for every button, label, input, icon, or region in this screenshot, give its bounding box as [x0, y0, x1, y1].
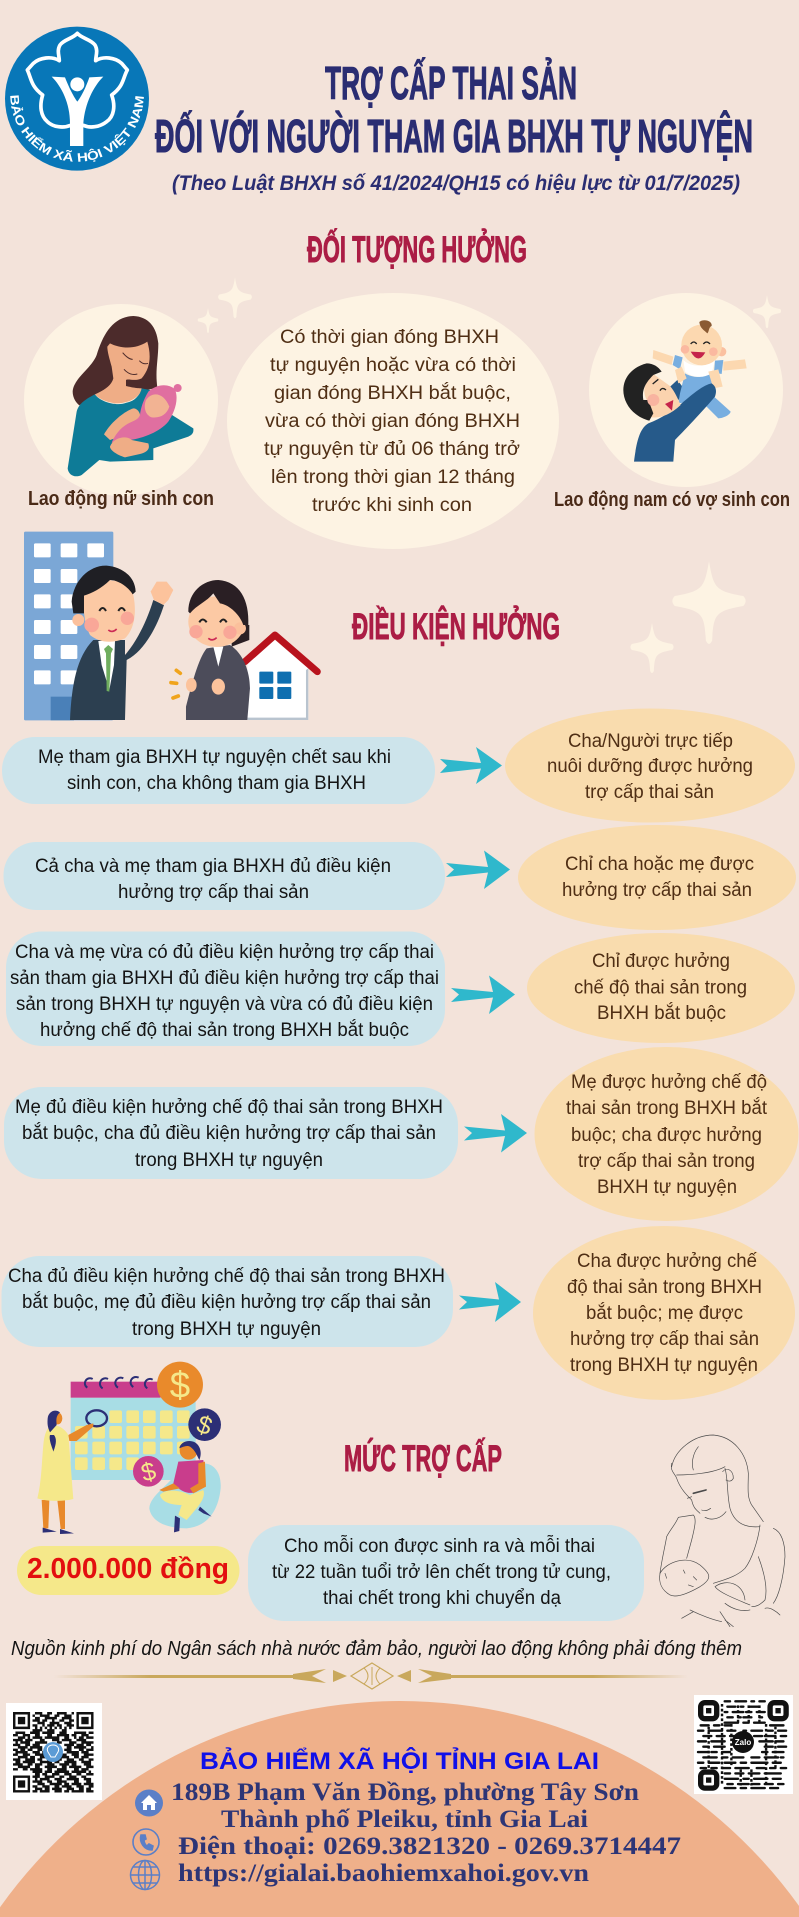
row 4 condition: Mẹ đủ điều kiện hưởng chế độ thai sản trong BHXH	[15, 1097, 443, 1118]
ornamental divider	[54, 1663, 688, 1689]
row 4 result: trợ cấp thai sản trong	[578, 1151, 755, 1172]
logo: Bảo hiểm xã hội Việt Nam: BẢO HIỂM XÃ HỘI VIỆT NAM	[10, 95, 144, 162]
row 3 condition: sản trong BHXH tự nguyện và vừa có đủ điều kiện	[16, 994, 433, 1015]
row 2 condition	[4, 842, 445, 910]
row 2 result: Chỉ cha hoặc mẹ được	[565, 854, 754, 875]
footer arc panel: Thành phố Pleiku, tỉnh Gia Lai	[221, 1806, 588, 1833]
illustration: office workers and house	[24, 532, 317, 720]
amount pill: 2.000.000 đồng	[27, 1553, 229, 1585]
illustration: calendar, coins and pregnant women: $	[170, 1365, 190, 1406]
row 5 result: trong BHXH tự nguyện	[570, 1355, 758, 1376]
row 4 condition: trong BHXH tự nguyện	[135, 1150, 323, 1171]
organisation name: BẢO HIỂM XÃ HỘI TỈNH GIA LAI	[200, 1746, 599, 1775]
description pill: Cho mỗi con được sinh ra và mỗi thai	[284, 1535, 595, 1557]
row 4 result: thai sản trong BHXH bắt	[566, 1097, 768, 1119]
row 1 condition	[2, 737, 435, 804]
row 2 result: hưởng trợ cấp thai sản	[562, 880, 752, 901]
man	[70, 600, 164, 720]
illustration: calendar, coins and pregnant women: $	[193, 1410, 216, 1441]
row 3 condition	[6, 932, 445, 1046]
row 5 result: độ thai sản trong BHXH	[567, 1277, 762, 1298]
website: https://gialai.baohiemxahoi.gov.vn	[178, 1860, 589, 1887]
row 2 condition: Cả cha và mẹ tham gia BHXH đủ điều kiện	[35, 856, 391, 877]
panel: điều kiện thời gian đóng: lên trong thời gian 12 tháng	[271, 467, 515, 488]
row 3 condition: Cha và mẹ vừa có đủ điều kiện hưởng trợ cấp thai	[15, 942, 434, 963]
decorative sparkles	[198, 277, 781, 673]
row 3 result: chế độ thai sản trong	[574, 978, 747, 998]
panel: lao động nam có vợ sinh con	[554, 293, 790, 511]
row 5 condition	[2, 1256, 453, 1347]
illustration: line drawing mother nursing	[660, 1435, 785, 1627]
illustration: calendar, coins and pregnant women	[37, 1362, 221, 1534]
row 3 result: BHXH bắt buộc	[597, 1002, 726, 1024]
row 1 result: trợ cấp thai sản	[585, 782, 714, 803]
QR code: website	[6, 1703, 102, 1800]
QR code: Zalo	[694, 1695, 793, 1794]
icon: father lifting baby	[623, 320, 747, 462]
row 3 condition: hưởng chế độ thai sản trong BHXH bắt buộc	[40, 1019, 409, 1041]
row 5 result: bắt buộc; mẹ được	[586, 1302, 743, 1324]
row 5 condition: trong BHXH tự nguyện	[132, 1319, 321, 1340]
panel: điều kiện thời gian đóng: tự nguyện từ đủ 06 tháng trở	[264, 439, 520, 460]
arrow 1	[440, 747, 502, 784]
row 4 condition	[4, 1087, 458, 1179]
arrow 5	[459, 1282, 521, 1322]
illustration: calendar, coins and pregnant women: $	[138, 1457, 159, 1488]
row 1 result: Cha/Người trực tiếp	[568, 731, 733, 752]
row 5 condition: bắt buộc, mẹ đủ điều kiện hưởng trợ cấp thai sản	[22, 1291, 431, 1313]
row 1 condition: Mẹ tham gia BHXH tự nguyện chết sau khi	[38, 747, 391, 768]
row 5 condition: Cha đủ điều kiện hưởng chế độ thai sản trong BHXH	[8, 1266, 445, 1287]
pregnant woman	[186, 645, 250, 720]
row 4 result	[534, 1047, 798, 1221]
row 1 condition: sinh con, cha không tham gia BHXH	[67, 773, 366, 794]
row 4 result: buộc; cha được hưởng	[571, 1125, 762, 1146]
row 3 result	[527, 933, 795, 1043]
panel: điều kiện thời gian đóng: gian đóng BHXH bắt buộc,	[274, 382, 511, 404]
heading: điều kiện hưởng: ĐIỀU KIỆN HƯỞNG	[352, 605, 560, 647]
seated woman	[149, 1463, 221, 1528]
description pill: thai chết trong khi chuyển dạ	[323, 1588, 561, 1609]
funding note: Nguồn kinh phí do Ngân sách nhà nước đảm bảo, người lao động không phải đóng thêm	[11, 1638, 742, 1660]
amount pill	[17, 1546, 240, 1595]
row 4 condition: bắt buộc, cha đủ điều kiện hưởng trợ cấp thai sản	[22, 1122, 436, 1144]
title: TRỢ CẤP THAI SẢN	[325, 57, 577, 109]
row 4 result: Mẹ được hưởng chế độ	[571, 1072, 767, 1093]
panel: lao động nữ sinh con	[24, 304, 218, 510]
label: Lao động nữ sinh con	[28, 488, 214, 510]
row 5 result: Cha được hưởng chế	[577, 1251, 757, 1272]
row 5 result: hưởng trợ cấp thai sản	[570, 1329, 759, 1350]
row 1 result	[505, 708, 795, 822]
panel: điều kiện thời gian đóng: trước khi sinh con	[312, 495, 472, 516]
arrow 4	[464, 1114, 527, 1152]
heading: mức trợ cấp: MỨC TRỢ CẤP	[344, 1437, 502, 1479]
icon: home	[135, 1790, 163, 1816]
description pill	[248, 1525, 644, 1621]
title	[155, 57, 753, 162]
icon: mother holding baby	[68, 316, 193, 476]
footer arc panel	[0, 1701, 799, 1917]
panel: điều kiện thời gian đóng: vừa có thời gian đóng BHXH	[265, 411, 520, 432]
QR code: Zalo: Zalo	[735, 1738, 751, 1747]
row 3 condition: sản tham gia BHXH đủ điều kiện hưởng trợ cấp thai	[10, 968, 439, 989]
heading: đối tượng hưởng: ĐỐI TƯỢNG HƯỞNG	[307, 228, 527, 270]
logo: Bảo hiểm xã hội Việt Nam	[5, 26, 149, 171]
standing woman	[42, 1500, 65, 1529]
row 1 result: nuôi dưỡng được hưởng	[547, 756, 753, 777]
panel: điều kiện thời gian đóng: Có thời gian đóng BHXH	[280, 327, 499, 348]
row 4 result: BHXH tự nguyện	[597, 1177, 737, 1198]
row 5 result	[533, 1226, 795, 1400]
arrow 3	[451, 976, 515, 1014]
house	[247, 640, 308, 720]
description pill: từ 22 tuần tuổi trở lên chết trong tử cung,	[272, 1562, 611, 1583]
panel: điều kiện thời gian đóng	[227, 293, 559, 549]
row 2 condition: hưởng trợ cấp thai sản	[118, 882, 309, 903]
subtitle: (Theo Luật BHXH số 41/2024/QH15 có hiệu lực từ 01/7/2025)	[172, 172, 740, 195]
arrow 2	[446, 850, 510, 889]
address: 189B Phạm Văn Đồng, phường Tây Sơn	[171, 1779, 639, 1806]
row 3 result: Chỉ được hưởng	[592, 951, 730, 972]
icon: globe	[130, 1860, 160, 1890]
row 2 result	[518, 825, 796, 930]
panel: điều kiện thời gian đóng: tự nguyện hoặc vừa có thời	[270, 355, 516, 376]
icon: phone	[133, 1829, 159, 1855]
phone numbers: Điện thoại: 0269.3821320 - 0269.3714447	[178, 1833, 681, 1860]
